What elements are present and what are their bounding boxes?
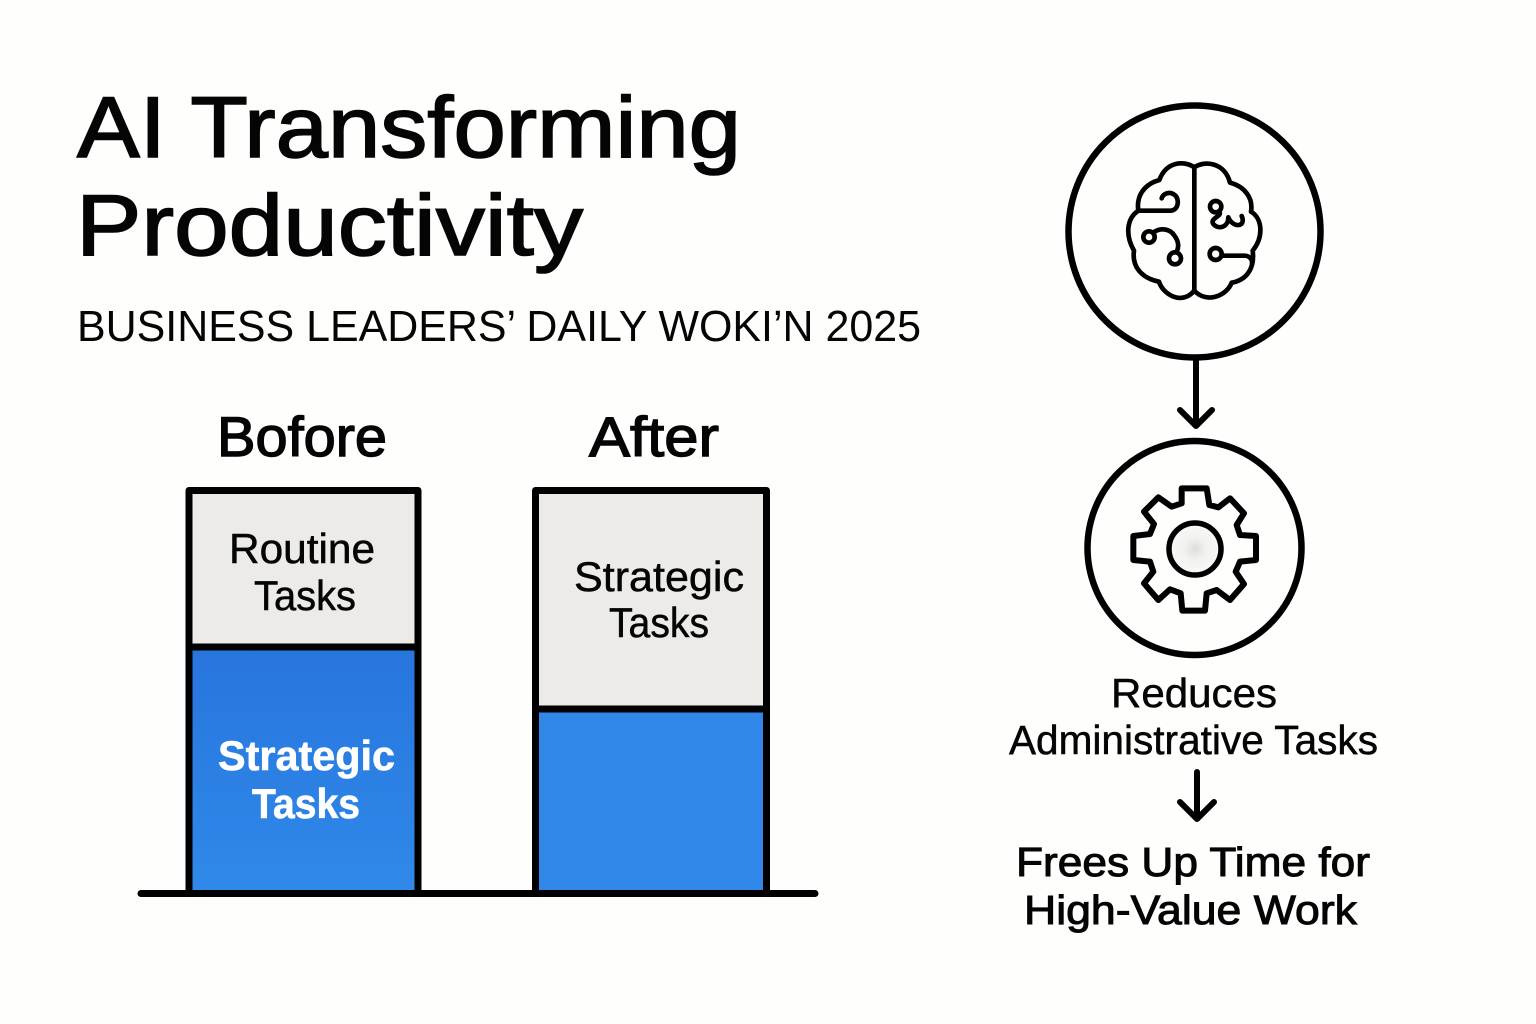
subtitle: BUSINESS LEADERS’ DAILY WOKI’N 2025 (77, 302, 921, 351)
bar chart: before and after (141, 405, 815, 894)
title: Productivity (76, 178, 583, 274)
icon: gear in circle (1088, 441, 1302, 655)
text: reduces administrative tasks: Reduces (1111, 670, 1277, 716)
text: frees up time for high-value work: High-Value Work (1024, 887, 1358, 933)
title: AI Transforming (77, 80, 741, 176)
heading: after: After (589, 405, 719, 468)
label: strategic tasks (218, 732, 395, 827)
label: strategic tasks: Strategic (218, 732, 395, 779)
text: frees up time for high-value work (1016, 839, 1370, 933)
arrow: brain to gear (1180, 358, 1212, 426)
label: routine tasks (229, 525, 375, 619)
label: routine tasks: Tasks (254, 572, 356, 619)
arrow: reduces to frees up (1180, 772, 1214, 819)
label: strategic tasks: Tasks (609, 599, 709, 646)
text: reduces administrative tasks: Administrative Tasks (1009, 717, 1378, 763)
text: frees up time for high-value work: Frees Up Time for (1016, 839, 1370, 885)
label: strategic tasks (574, 553, 744, 646)
label: strategic tasks: Strategic (574, 553, 744, 600)
before bar (189, 490, 418, 893)
after bar (536, 490, 766, 893)
label: strategic tasks: Tasks (252, 780, 360, 827)
text: reduces administrative tasks (1009, 670, 1378, 763)
icon: brain in circle (1068, 106, 1320, 358)
label: routine tasks: Routine (229, 525, 375, 572)
chart baseline (141, 890, 815, 897)
heading: before: Bofore (217, 405, 387, 468)
title (76, 80, 741, 274)
